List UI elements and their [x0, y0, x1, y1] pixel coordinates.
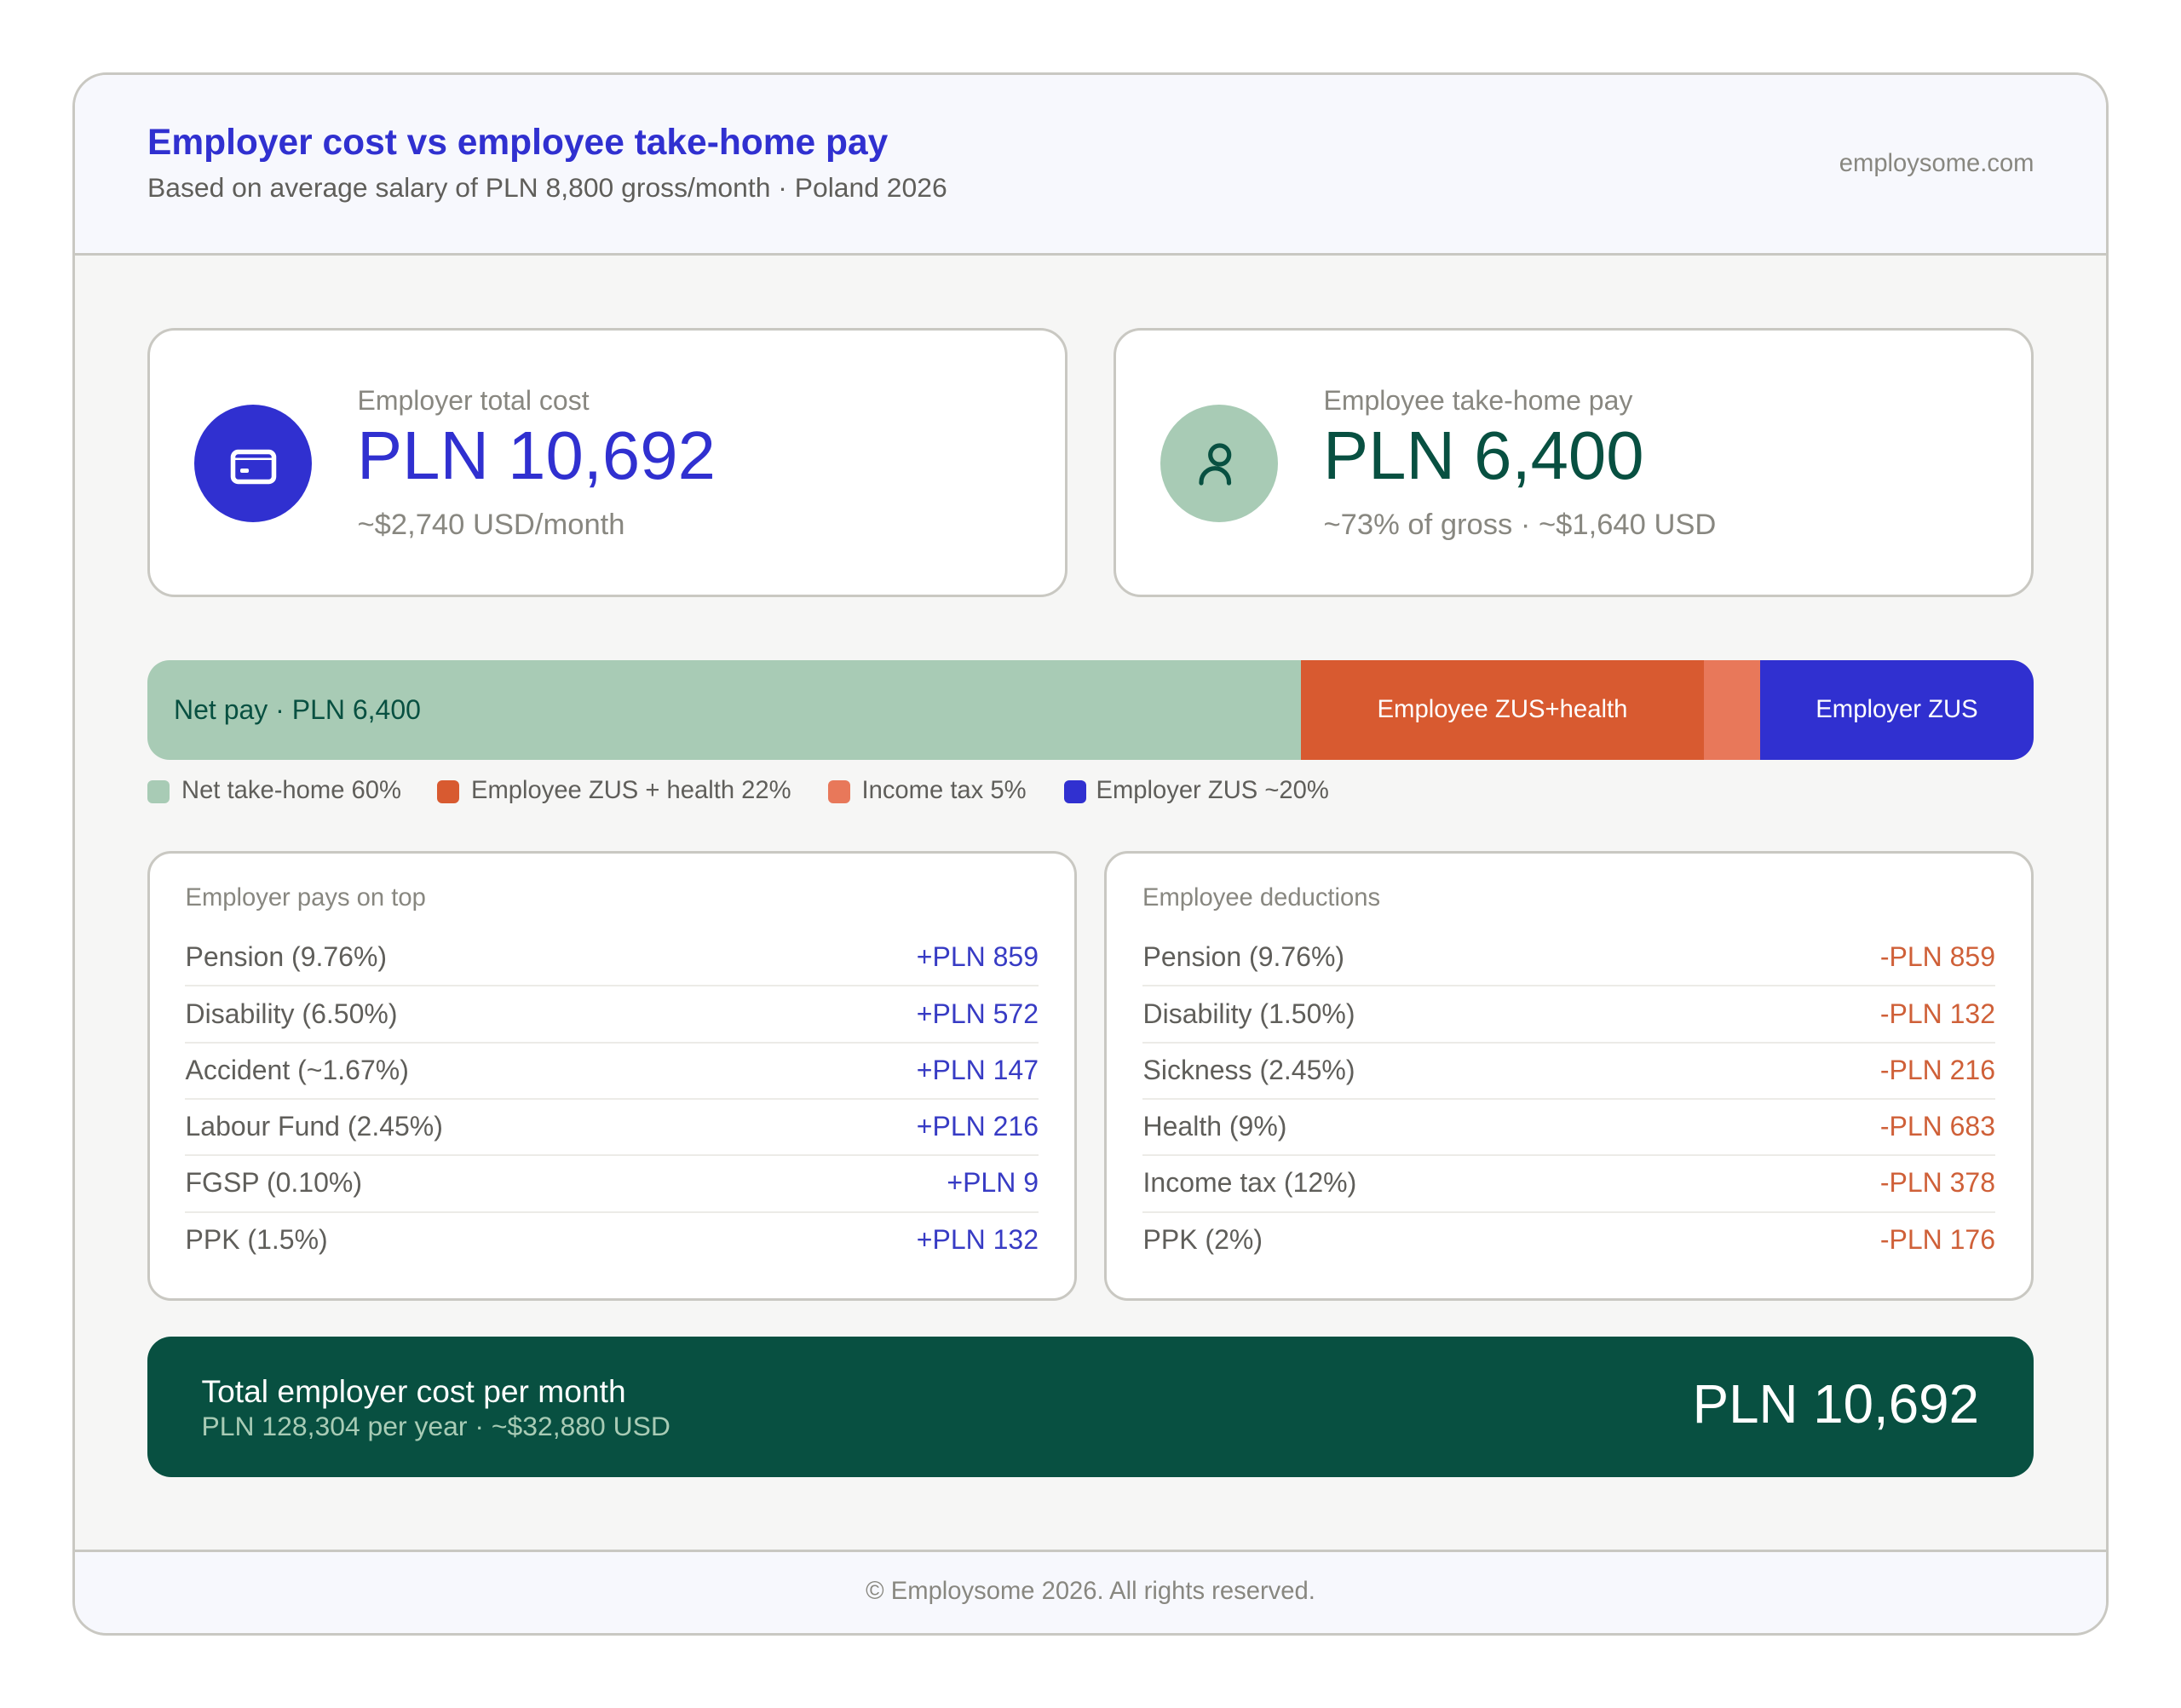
- row: sickness: [1143, 1055, 1995, 1085]
- row: disability: Disability (6.50%): [186, 998, 397, 1029]
- row: income tax: -PLN 378: [1880, 1167, 1995, 1198]
- legend: [147, 777, 1329, 804]
- panel: employee deductions: [1104, 851, 2034, 1301]
- row: pension: -PLN 859: [1880, 941, 1995, 972]
- legend text: income tax: Income tax 5%: [862, 777, 1027, 804]
- header band: [75, 75, 2106, 256]
- segment label: Net pay · PLN 6,400: [174, 694, 421, 725]
- row: health: [1143, 1111, 1995, 1142]
- banner title: Total employer cost per month: [201, 1373, 626, 1409]
- segment label: Employee ZUS+health: [1378, 695, 1627, 723]
- row: pension: +PLN 859: [917, 941, 1039, 972]
- row: sickness: Sickness (2.45%): [1143, 1055, 1355, 1085]
- banner subtitle: PLN 128,304 per year · ~$32,880 USD: [201, 1411, 670, 1441]
- panel: employer total cost: [147, 328, 1067, 597]
- row: health: Health (9%): [1143, 1111, 1286, 1142]
- row: labour fund: [186, 1111, 1039, 1142]
- row: accident: [186, 1055, 1039, 1085]
- banner amount: PLN 10,692: [1693, 1373, 1979, 1435]
- amount: PLN 10,692: [357, 417, 716, 493]
- usd note: ~$2,740 USD/month: [358, 509, 625, 541]
- copyright: © Employsome 2026. All rights reserved.: [866, 1578, 1315, 1605]
- segment label: Employer ZUS: [1816, 695, 1978, 723]
- row: FGSP: FGSP (0.10%): [186, 1167, 362, 1198]
- row: income tax: Income tax (12%): [1143, 1167, 1356, 1198]
- segment: employee ZUS + health: [1301, 660, 1704, 760]
- row: disability: +PLN 572: [917, 998, 1039, 1029]
- legend text: employer ZUS: Employer ZUS ~20%: [1096, 777, 1329, 804]
- row: FGSP: +PLN 9: [947, 1167, 1039, 1198]
- row: income tax: [1143, 1167, 1995, 1198]
- panel: employee take-home pay: [1114, 328, 2034, 597]
- segment: net pay: [147, 660, 1301, 760]
- row: pension: [186, 941, 1039, 972]
- row: accident: Accident (~1.67%): [186, 1055, 409, 1085]
- site name: employsome.com: [1839, 150, 2034, 177]
- row: labour fund: +PLN 216: [917, 1111, 1039, 1142]
- label: Employee take-home pay: [1324, 385, 1632, 416]
- icon: person: [1160, 405, 1278, 522]
- row: disability: [1143, 998, 1995, 1029]
- segment: income tax: [1704, 660, 1760, 760]
- row: sickness: -PLN 216: [1880, 1055, 1995, 1085]
- legend text: employee ZUS: Employee ZUS + health 22%: [471, 777, 791, 804]
- stacked bar: [147, 660, 2034, 760]
- row: labour fund: Labour Fund (2.45%): [186, 1111, 443, 1142]
- row: disability: -PLN 132: [1880, 998, 1995, 1029]
- title: Employer cost vs employee take-home pay: [147, 123, 888, 163]
- row: PPK: [1143, 1224, 1995, 1255]
- legend swatch: income tax: [828, 780, 850, 803]
- amount: PLN 6,400: [1323, 417, 1644, 493]
- row: pension: [1143, 941, 1995, 972]
- percent and usd note: ~73% of gross · ~$1,640 USD: [1324, 509, 1716, 541]
- row: disability: Disability (1.50%): [1143, 998, 1355, 1029]
- legend swatch: employer ZUS: [1063, 780, 1085, 803]
- row: PPK: -PLN 176: [1880, 1224, 1995, 1255]
- legend swatch: employee ZUS: [437, 780, 459, 803]
- row: pension: Pension (9.76%): [186, 941, 387, 972]
- row: FGSP: [186, 1167, 1039, 1198]
- total banner: [147, 1337, 2034, 1477]
- legend text: net: Net take-home 60%: [181, 777, 401, 804]
- row: PPK: PPK (1.5%): [186, 1224, 328, 1255]
- panel heading: Employee deductions: [1142, 884, 1380, 912]
- subtitle: Based on average salary of PLN 8,800 gross/month · Poland 2026: [147, 172, 947, 203]
- row: PPK: [186, 1224, 1039, 1255]
- footer band: [75, 1550, 2106, 1633]
- row: disability: [186, 998, 1039, 1029]
- icon: credit card: [194, 405, 312, 522]
- row: health: -PLN 683: [1880, 1111, 1995, 1142]
- panel: employer pays on top: [147, 851, 1077, 1301]
- row: PPK: +PLN 132: [917, 1224, 1039, 1255]
- segment: employer ZUS: [1760, 660, 2034, 760]
- row: pension: Pension (9.76%): [1143, 941, 1344, 972]
- row: PPK: PPK (2%): [1143, 1224, 1263, 1255]
- panel heading: Employer pays on top: [186, 884, 426, 912]
- row: accident: +PLN 147: [917, 1055, 1039, 1085]
- legend swatch: net: [147, 780, 170, 803]
- label: Employer total cost: [358, 385, 590, 416]
